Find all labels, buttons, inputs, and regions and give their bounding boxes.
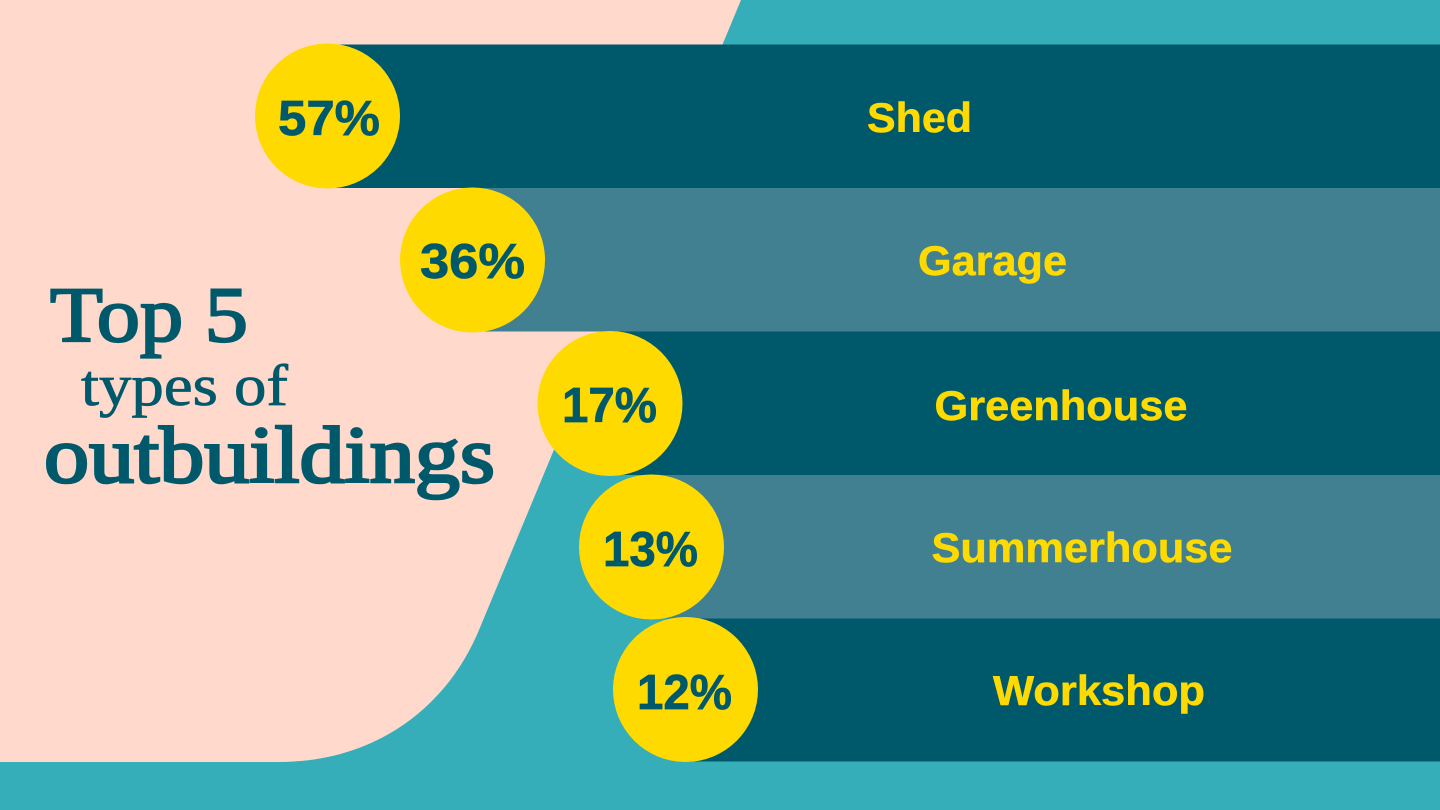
bar: Summerhouse bbox=[651, 475, 1440, 618]
panel: pink shape bbox=[0, 0, 741, 762]
row: Greenhouse bbox=[538, 331, 1440, 476]
title line: outbuildings: outbuildings bbox=[44, 412, 495, 500]
label: Shed: Shed bbox=[867, 94, 972, 141]
value: 12%: 12% bbox=[637, 666, 732, 720]
bar: Workshop bbox=[685, 618, 1440, 762]
label: Summerhouse: Summerhouse bbox=[932, 524, 1232, 571]
title line: types of: types of bbox=[81, 353, 289, 418]
bar: Greenhouse bbox=[610, 332, 1440, 475]
bar: Garage bbox=[473, 188, 1440, 332]
title bbox=[44, 271, 495, 500]
value: 57%: 57% bbox=[278, 92, 380, 146]
value: 36%: 36% bbox=[420, 235, 525, 289]
label: Garage: Garage bbox=[918, 237, 1067, 284]
label: Greenhouse: Greenhouse bbox=[934, 382, 1188, 429]
value: 13%: 13% bbox=[603, 523, 698, 577]
title line: Top 5: Top 5 bbox=[50, 271, 248, 358]
value: 17%: 17% bbox=[562, 379, 657, 433]
row: Garage bbox=[400, 188, 1440, 332]
row: Summerhouse bbox=[579, 474, 1440, 620]
row: Workshop bbox=[613, 617, 1440, 762]
badge: 57% bbox=[255, 44, 400, 188]
label: Workshop: Workshop bbox=[993, 667, 1205, 714]
badge: 17% bbox=[538, 331, 682, 476]
badge: 13% bbox=[579, 474, 724, 620]
badge: 12% bbox=[613, 617, 758, 762]
row: Shed bbox=[255, 44, 1440, 188]
badge: 36% bbox=[400, 188, 545, 332]
bar: Shed bbox=[328, 44, 1440, 188]
